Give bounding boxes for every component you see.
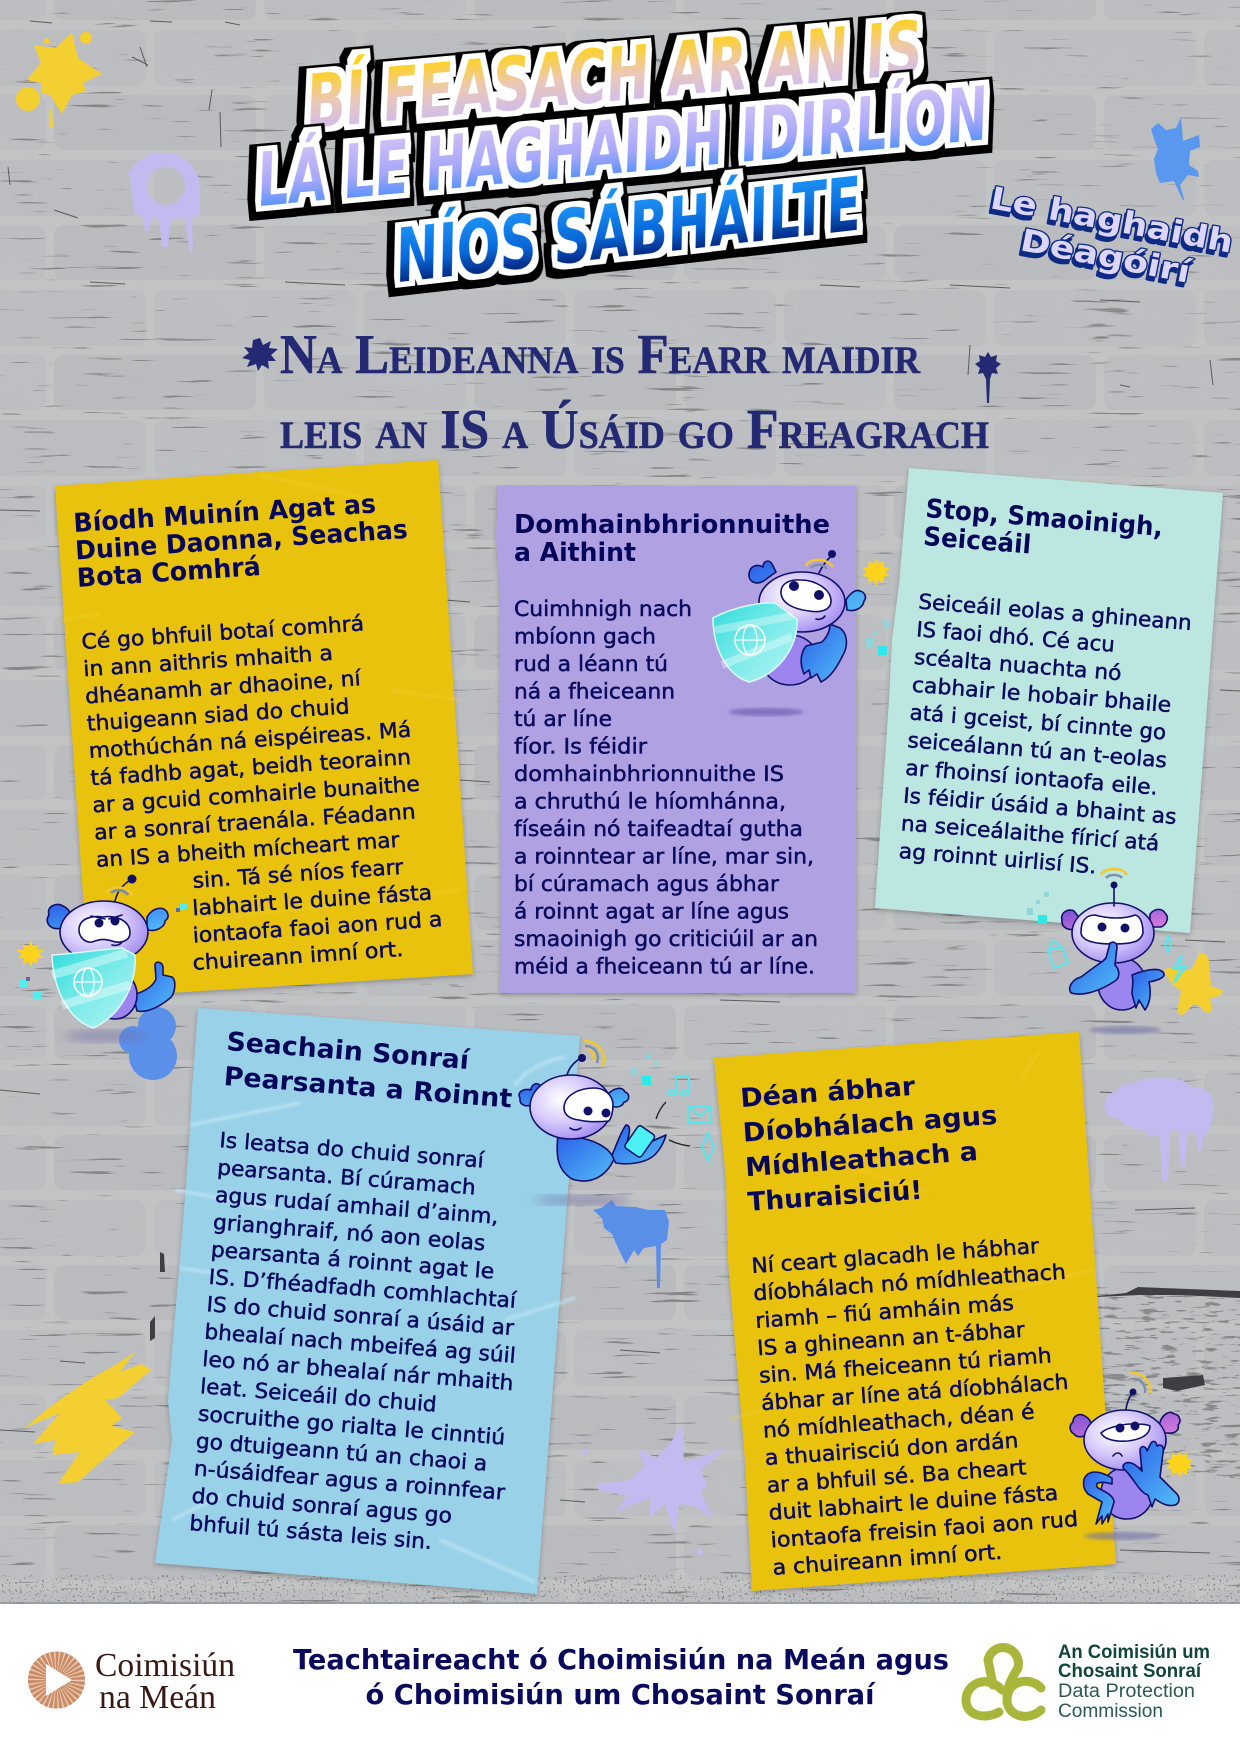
body text: ar a gcuid comhairle bunaithe — [92, 772, 420, 817]
body text: IS. D’fhéadfadh comhlachtaí — [208, 1265, 518, 1313]
body text — [898, 590, 1193, 884]
body text: a roinntear ar líne, mar sin, — [514, 844, 814, 868]
heading: Duine Daonna, Seachas — [74, 515, 409, 566]
splatter: navy left of tagline — [242, 338, 278, 371]
splatter: blue blobs — [119, 1007, 177, 1080]
body text: go dtuigeann tú an chaoi a — [195, 1429, 488, 1476]
body text: pearsanta. Bí cúramach — [216, 1155, 477, 1200]
panel: stop think check — [875, 468, 1223, 933]
body text: á roinnt agat ar líne agus — [514, 900, 789, 924]
body text: Is féidir úsáid a bhaint as — [902, 784, 1177, 829]
body text: ar a sonraí traenála. Féadann — [93, 799, 416, 845]
logo: Data Protection Commission: Data Protection — [1058, 1681, 1195, 1702]
body text: IS faoi dhó. Cé acu — [915, 617, 1116, 657]
body text: dhéanamh ar dhaoine, ní — [84, 666, 363, 708]
body text: n-úsáidfear agus a roinnfear — [193, 1456, 506, 1505]
footer band — [0, 1602, 1240, 1754]
body text: riamh – fiú amháin más — [755, 1291, 1015, 1333]
body text: seiceálann tú an t-eolas — [907, 728, 1168, 772]
body text: ar a bhfuil sé. Ba cheart — [766, 1455, 1027, 1497]
body text: ag roinnt uirlisí IS. — [898, 839, 1097, 878]
heading — [73, 488, 410, 594]
heading — [922, 494, 1164, 571]
body text: smaoinigh go criticiúil ar an — [514, 927, 818, 951]
body text: na seiceálaithe fíricí atá — [900, 811, 1160, 856]
body text: thuigeann siad do chuid — [86, 694, 350, 736]
body text: leo nó ar bhealaí nár mhaith — [202, 1347, 514, 1395]
footer message: Teachtaireacht ó Choimisiún na Meán agus — [293, 1643, 949, 1676]
mascot: finger on lips — [1027, 869, 1186, 1034]
tagline: leis an IS a Úsáid go Freagrach — [280, 399, 989, 461]
body text: an IS a bheith mícheart mar — [95, 828, 401, 872]
logo: Data Protection Commission — [966, 1642, 1210, 1722]
heading: Déan ábhar — [739, 1072, 916, 1114]
body text: a chuireann imní ort. — [772, 1540, 1003, 1580]
panel: report harmful content — [714, 1032, 1116, 1591]
sub-title: for teens — [988, 180, 1236, 291]
panel: recognise deepfakes — [496, 486, 856, 993]
mascot: hand up — [1070, 1373, 1193, 1540]
body text: in ann aithris mhaith a — [83, 641, 334, 681]
body text: mothúchán ná eispéireas. Má — [88, 718, 412, 763]
body text: a chruthú le híomhánna, — [514, 790, 786, 814]
heading: Thuraisiciú! — [747, 1176, 923, 1218]
body text: bí cúramach agus ábhar — [514, 872, 779, 896]
heading: Mídhleathach a — [744, 1137, 979, 1183]
heading: Seachain Sonraí — [225, 1027, 472, 1076]
title: NÍOS SÁBHÁILTE — [391, 159, 866, 300]
body text: rud a léann tú — [514, 652, 668, 676]
sub-title: for teens: Le haghaidh — [988, 180, 1236, 261]
body text: bhealaí nach mbeifeá ag súil — [204, 1320, 517, 1368]
body text: tá fadhb agat, beidh teorainn — [90, 745, 412, 790]
body text: cabhair le hobair bhaile — [911, 673, 1172, 717]
body text: Cé go bhfuil botaí comhrá — [81, 611, 365, 654]
heading: Seiceáil — [922, 522, 1032, 561]
logo: Data Protection Commission: Commission — [1058, 1701, 1163, 1722]
heading: Domhainbhrionnuithe — [514, 510, 830, 540]
panel: trust a human — [55, 460, 473, 998]
logo: Data Protection Commission: Chosaint Sonraí — [1058, 1661, 1202, 1682]
splatter: lavender ring — [127, 153, 200, 252]
heading: Stop, Smaoinigh, — [924, 494, 1164, 543]
body text: scéalta nuachta nó — [913, 645, 1122, 685]
body text: ar fhoinsí iontaofa eile. — [905, 756, 1159, 800]
body text: grianghraif, nó aon eolas — [212, 1210, 486, 1255]
body text: chuireann imní ort. — [192, 937, 404, 975]
body text: a thuairisciú don ardán — [764, 1428, 1019, 1470]
splatter: blue drip — [593, 1200, 669, 1288]
splatter: yellow streak — [25, 1352, 151, 1484]
logo: Data Protection Commission: An Coimisiún um — [1058, 1642, 1210, 1663]
mascot: holding a phone — [519, 1041, 714, 1205]
body text — [751, 1232, 1086, 1580]
body text: Cuimhnigh nach — [514, 597, 692, 621]
title — [254, 3, 992, 300]
heading — [223, 1027, 516, 1115]
body text: agus rudaí amhail d’ainm, — [214, 1183, 499, 1229]
body text: sin. Má fheiceann tú riamh — [758, 1343, 1052, 1388]
splatter: yellow star right — [1164, 953, 1222, 1015]
body text: Seiceáil eolas a ghineann — [918, 590, 1193, 635]
sub-title: for teens: Déagóirí — [1017, 223, 1195, 291]
logo: Coimisiún na Meán: Coimisiún — [95, 1647, 235, 1684]
body text: do chuid sonraí agus go — [191, 1484, 453, 1528]
tagline — [280, 324, 989, 461]
logo: Coimisiún na Meán: na Meán — [99, 1679, 216, 1716]
body text: tú ar líne — [514, 707, 612, 731]
body text: díobhálach nó mídhleathach — [753, 1260, 1067, 1305]
body text: iontaofa faoi aon rud a — [192, 907, 443, 948]
heading: Pearsanta a Roinnt — [223, 1062, 513, 1115]
heading: Díobhálach agus — [742, 1101, 998, 1149]
body text: ná a fheiceann — [514, 680, 675, 704]
body text: socruithe go rialta le cinntiú — [197, 1402, 506, 1450]
logo: Coimisiún na Meán — [28, 1647, 235, 1716]
heading: a Aithint — [514, 538, 636, 568]
body text — [189, 1128, 532, 1559]
body text: leat. Seiceáil do chuid — [199, 1374, 438, 1417]
body text: Is leatsa do chuid sonraí — [219, 1128, 486, 1173]
mascot: thumbs up with shield — [17, 874, 187, 1042]
body text: nó mídhleathach, déan é — [762, 1400, 1035, 1443]
panel: do not share personal data — [155, 1008, 580, 1594]
heading — [514, 510, 830, 568]
footer message: ó Choimisiún um Chosaint Sonraí — [366, 1678, 876, 1711]
body text: sin. Tá sé níos fearr — [192, 855, 404, 893]
splatter: blue top right — [1151, 117, 1200, 201]
heading: Bota Comhrá — [76, 552, 262, 594]
splatter: lavender burst — [582, 1424, 727, 1555]
body text — [81, 607, 445, 981]
body text: pearsanta á roinnt agat le — [210, 1237, 495, 1284]
heading: Bíodh Muinín Agat as — [73, 489, 377, 539]
body text: atá i gceist, bí cinnte go — [909, 700, 1167, 745]
body text: bhfuil tú sásta leis sin. — [189, 1511, 433, 1554]
body text: duit labhairt le duine fásta — [768, 1481, 1059, 1525]
body text: IS do chuid sonraí a úsáid ar — [206, 1292, 515, 1340]
mascot: looking up with shield — [713, 550, 890, 716]
body text: domhainbhrionnuithe IS — [514, 762, 784, 786]
body text: ábhar ar líne atá díobhálach — [760, 1370, 1069, 1415]
heading — [739, 1066, 1003, 1218]
splatter: yellow star top left — [16, 32, 102, 128]
footer message — [293, 1643, 949, 1711]
body text: IS a ghineann an t-ábhar — [756, 1318, 1026, 1360]
body text: iontaofa freisin faoi aon rud — [770, 1507, 1079, 1552]
body text: mbíonn gach — [514, 624, 656, 648]
body text: labhairt le duine fásta — [192, 880, 433, 920]
tagline: Na Leideanna is Fearr maidir — [280, 324, 921, 386]
splatter: navy right of tagline — [975, 352, 1001, 403]
body text — [514, 597, 818, 978]
body text: físeáin nó taifeadtaí gutha — [514, 817, 803, 841]
body text: Ní ceart glacadh le hábhar — [751, 1234, 1040, 1278]
splatter: lavender cloud — [1104, 1077, 1213, 1181]
body text: méid a fheiceann tú ar líne. — [514, 954, 815, 978]
body text: fíor. Is féidir — [514, 734, 647, 758]
